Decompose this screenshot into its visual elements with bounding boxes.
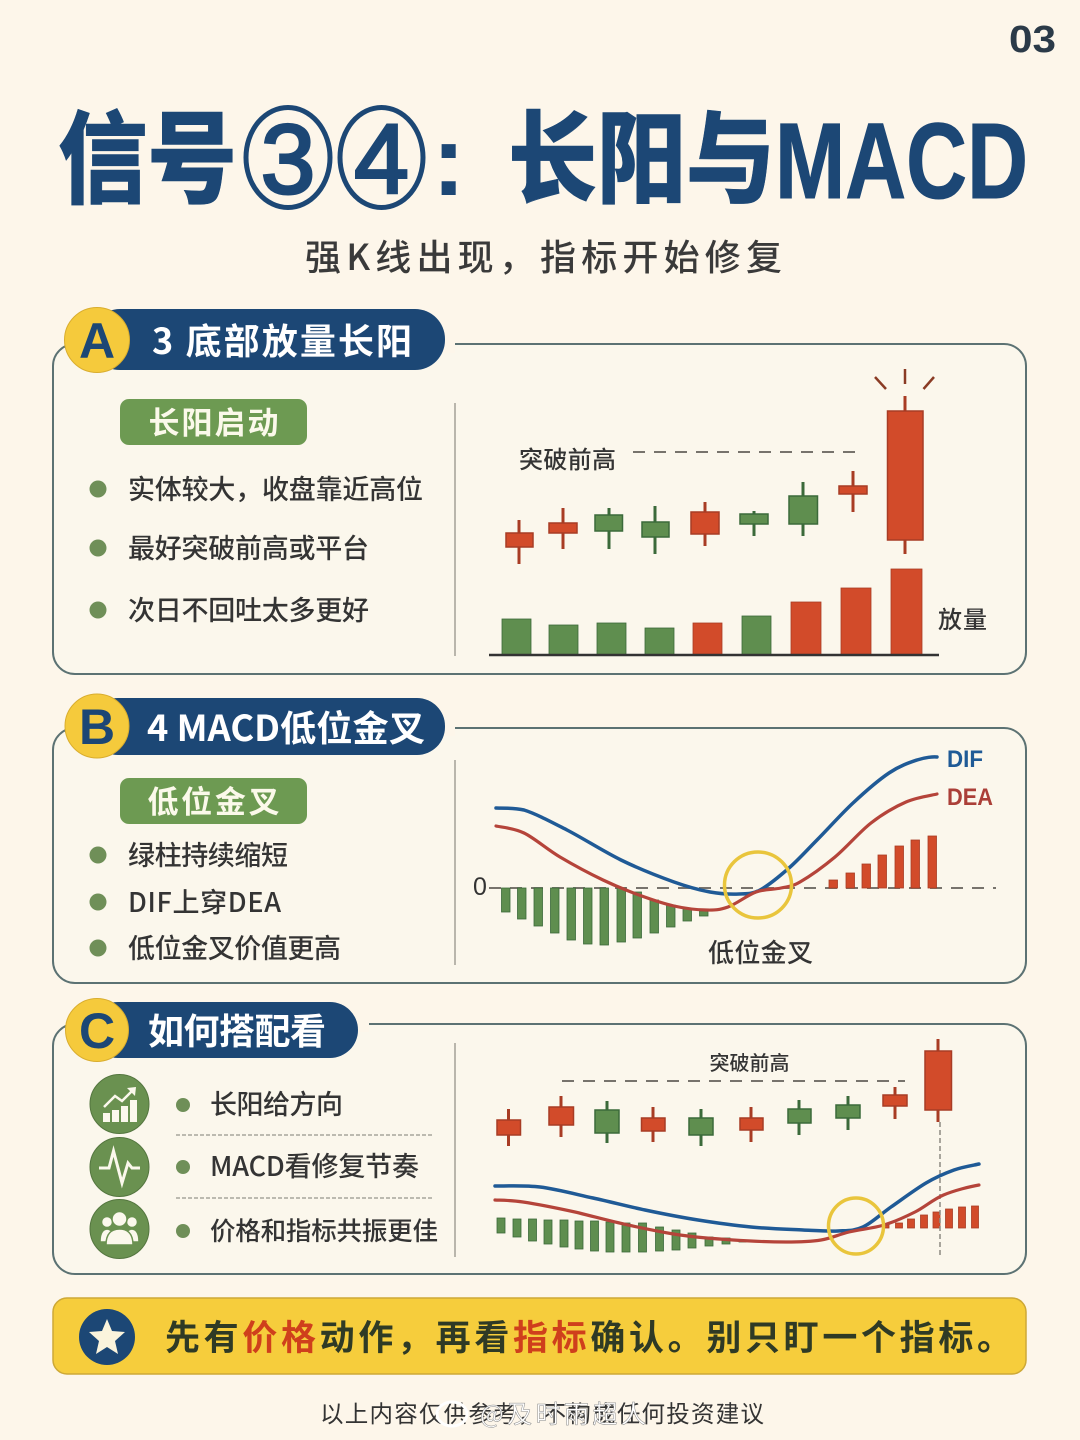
- DIF line: [495, 1164, 979, 1231]
- panel B header: 4 MACD低位金叉: [147, 700, 425, 752]
- panel B bullets: DIF上穿DEA: [128, 881, 281, 920]
- title: [58, 78, 1028, 225]
- tag: long candle start: 长阳启动: [148, 398, 278, 443]
- DIF label: DIF: [947, 746, 983, 773]
- panel A frame: [53, 344, 1026, 674]
- burst marks: [875, 369, 934, 389]
- panel B bullets: 绿柱持续缩短: [128, 834, 288, 873]
- panel A bullets: 次日不回吐太多更好: [128, 589, 369, 628]
- icon: star: [79, 1309, 135, 1365]
- cross highlight ring: [724, 852, 792, 918]
- candlestick and volume chart: [489, 369, 987, 655]
- takeaway banner: [53, 1298, 1026, 1374]
- panel B frame: [53, 728, 1026, 983]
- histogram: [502, 836, 936, 945]
- panel B bullets: 低位金叉价值更高: [128, 927, 341, 966]
- golden cross label: 低位金叉: [708, 933, 813, 970]
- title: :: [432, 105, 465, 217]
- panel A bullets: 最好突破前高或平台: [128, 527, 369, 566]
- panel A: bottom volume long candle: [53, 308, 1026, 674]
- tag: low golden cross: [120, 777, 307, 824]
- panel B header: B: [79, 699, 115, 755]
- zero label: 0: [473, 873, 487, 901]
- MACD chart: [473, 746, 996, 970]
- title: 4: [354, 104, 409, 214]
- panel A header: A: [79, 313, 115, 369]
- tag: long candle start: [120, 398, 307, 445]
- DEA label: DEA: [947, 784, 993, 811]
- panel A header: 3 底部放量长阳: [152, 313, 412, 365]
- icon: rising bars: [90, 1074, 149, 1134]
- icon: people: [90, 1200, 149, 1258]
- DEA line: [495, 1185, 979, 1242]
- title: 长阳与: [508, 78, 775, 225]
- subtitle: 强K线出现，指标开始修复: [305, 229, 782, 281]
- panel C header: [66, 998, 369, 1062]
- DIF line: [496, 757, 937, 894]
- panel A header: [64, 308, 455, 372]
- breakout label: 突破前高: [710, 1047, 790, 1076]
- takeaway text: 先有价格动作，再看指标确认。别只盯一个指标。: [165, 1310, 1012, 1361]
- panel C bullets: MACD看修复节奏: [210, 1145, 419, 1184]
- panel A bullets: [90, 468, 423, 628]
- panel C frame: [53, 1024, 1026, 1274]
- panel B bullets: [90, 834, 341, 966]
- panel C: how to combine: [53, 998, 1026, 1274]
- panel C header: C: [79, 1003, 115, 1059]
- panel A bullets: 实体较大，收盘靠近高位: [128, 468, 423, 507]
- volume bars: [502, 569, 922, 655]
- volume label: 放量: [938, 600, 987, 635]
- title: 3: [261, 104, 315, 214]
- panel C bullets: [176, 1083, 438, 1248]
- cross highlight ring: [828, 1198, 884, 1254]
- panel C bullets: 价格和指标共振更佳: [210, 1211, 438, 1248]
- panel C bullets: 长阳给方向: [210, 1083, 343, 1122]
- title: 信号: [58, 78, 237, 225]
- DEA line: [496, 794, 937, 910]
- disclaimer: 以上内容仅供参考，不构成任何投资建议: [320, 1395, 764, 1429]
- icon: pulse: [90, 1138, 149, 1196]
- breakout label: 突破前高: [519, 440, 616, 475]
- panel B: MACD low golden cross: [53, 694, 1026, 983]
- combined chart: [495, 1039, 979, 1258]
- page number: 03: [1009, 19, 1056, 61]
- histogram: [497, 1206, 978, 1252]
- tag: low golden cross: 低位金叉: [148, 777, 280, 822]
- panel B header: [65, 694, 455, 758]
- panel C header: 如何搭配看: [148, 1003, 326, 1055]
- watermark: @及时雨超人: [480, 1395, 646, 1431]
